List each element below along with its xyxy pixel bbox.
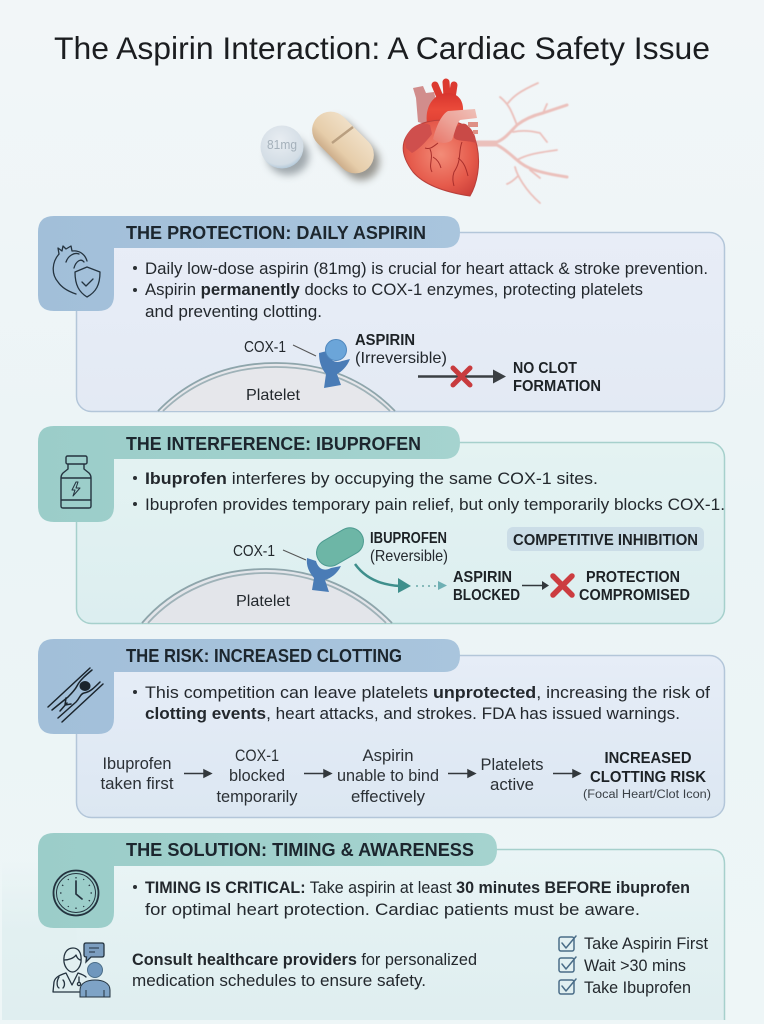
text: consult providers bbox=[132, 950, 477, 990]
bullet list bbox=[133, 469, 725, 514]
flow: clotting sequence: (Focal Heart/Clot Icon) bbox=[583, 789, 711, 801]
flow: clotting sequence: CLOTTING RISK bbox=[590, 769, 706, 786]
checklist: Take Ibuprofen bbox=[584, 978, 691, 997]
icon: 81mg round tablet bbox=[260, 126, 309, 175]
flow: clotting sequence bbox=[100, 746, 711, 806]
icon: heart with shield bbox=[53, 246, 100, 297]
diagram: ibuprofen on platelet: COMPROMISED bbox=[579, 587, 690, 604]
heading: THE RISK: INCREASED CLOTTING bbox=[126, 645, 402, 666]
arrow to red cross bbox=[522, 576, 572, 595]
arrow with red cross bbox=[418, 368, 506, 385]
diagram: ibuprofen on platelet: Platelet bbox=[236, 593, 291, 610]
icon: narrowed artery with clot bbox=[48, 668, 103, 722]
checklist: Take Aspirin First bbox=[584, 934, 708, 953]
flow: clotting sequence: COX-1 bbox=[235, 746, 279, 765]
bullet list: for optimal heart protection. Cardiac patients must be aware. bbox=[145, 900, 640, 919]
flow: clotting sequence: INCREASED bbox=[604, 750, 692, 767]
icon: beige capsule bbox=[304, 104, 387, 188]
bullet list: and preventing clotting. bbox=[145, 302, 322, 321]
title: The Aspirin Interaction: A Cardiac Safety Issue bbox=[54, 30, 710, 66]
flow: clotting sequence: Ibuprofen bbox=[102, 754, 172, 773]
diagram: aspirin on platelet bbox=[158, 332, 601, 411]
flow: clotting sequence: Platelets bbox=[480, 755, 544, 774]
diagram: aspirin on platelet: FORMATION bbox=[513, 378, 601, 395]
text: consult providers: medication schedules to ensure safety. bbox=[132, 971, 426, 990]
panel: the protection bbox=[38, 216, 724, 412]
bullet list bbox=[133, 878, 690, 919]
arrow: curved teal with dotted extension bbox=[355, 564, 447, 593]
diagram: aspirin on platelet: Platelet bbox=[246, 387, 301, 404]
flow: clotting sequence: effectively bbox=[351, 787, 425, 806]
flow: clotting sequence: active bbox=[490, 775, 534, 794]
panel: the interference bbox=[38, 426, 725, 624]
panel: the solution bbox=[38, 833, 724, 1020]
icon: medicine bottle bbox=[61, 456, 91, 508]
checklist: Wait >30 mins bbox=[584, 956, 686, 975]
diagram: aspirin on platelet: ASPIRIN bbox=[355, 332, 415, 349]
panel: the risk bbox=[38, 639, 724, 818]
heading: THE PROTECTION: DAILY ASPIRIN bbox=[126, 222, 426, 243]
bullet list: clotting events, heart attacks, and strokes. FDA has issued warnings. bbox=[145, 704, 680, 723]
diagram: ibuprofen on platelet bbox=[142, 523, 704, 623]
bullet list bbox=[133, 683, 710, 723]
text: consult providers: Consult healthcare providers for personalized bbox=[132, 950, 477, 969]
icon: clock bbox=[54, 870, 98, 916]
icon: receptor with ibuprofen capsule bbox=[307, 523, 368, 592]
icon: 81mg round tablet: 81mg bbox=[267, 138, 297, 152]
diagram: ibuprofen on platelet: IBUPROFEN bbox=[370, 530, 447, 547]
diagram: ibuprofen on platelet: ASPIRIN bbox=[453, 569, 512, 586]
bullet list: This competition can leave platelets unprotected , increasing the risk of bbox=[145, 683, 710, 702]
flow: clotting sequence: Aspirin bbox=[362, 746, 414, 765]
diagram: ibuprofen on platelet: PROTECTION bbox=[586, 569, 680, 586]
flow: clotting sequence: unable to bind bbox=[337, 766, 439, 785]
bullet list: Ibuprofen provides temporary pain relief, but only temporarily blocks COX-1. bbox=[145, 495, 725, 514]
illustration: pills and heart bbox=[260, 82, 567, 203]
heading: THE SOLUTION: TIMING & AWARENESS bbox=[126, 839, 474, 860]
diagram: aspirin on platelet: (Irreversible) bbox=[355, 350, 447, 367]
diagram: ibuprofen on platelet: COX-1 bbox=[233, 543, 275, 560]
flow: clotting sequence: temporarily bbox=[216, 787, 298, 806]
bullet list bbox=[133, 259, 708, 321]
diagram: aspirin on platelet: NO CLOT bbox=[513, 360, 577, 377]
label: competitive inhibition: COMPETITIVE INHIBITION bbox=[513, 532, 698, 549]
bullet list: Aspirin permanently docks to COX-1 enzymes, protecting platelets bbox=[145, 280, 643, 299]
bullet list: Daily low-dose aspirin (81mg) is crucial for heart attack & stroke prevention. bbox=[145, 259, 708, 278]
icon: doctor and patient bbox=[53, 943, 110, 997]
flow: clotting sequence: taken first bbox=[100, 774, 174, 793]
bullet list: TIMING IS CRITICAL: Take aspirin at least 30 minutes BEFORE ibuprofen bbox=[145, 878, 690, 897]
diagram: ibuprofen on platelet: BLOCKED bbox=[453, 587, 520, 604]
label: competitive inhibition bbox=[507, 527, 704, 551]
icon: anatomical heart with vessels bbox=[403, 82, 567, 203]
flow: clotting sequence: blocked bbox=[229, 766, 285, 785]
diagram: aspirin on platelet: COX-1 bbox=[244, 339, 286, 356]
bullet list: Ibuprofen interferes by occupying the same COX-1 sites. bbox=[145, 469, 598, 488]
icon: receptor with aspirin bbox=[319, 340, 350, 388]
checklist bbox=[559, 934, 708, 997]
diagram: ibuprofen on platelet: (Reversible) bbox=[370, 548, 448, 565]
heading: THE INTERFERENCE: IBUPROFEN bbox=[126, 433, 421, 454]
